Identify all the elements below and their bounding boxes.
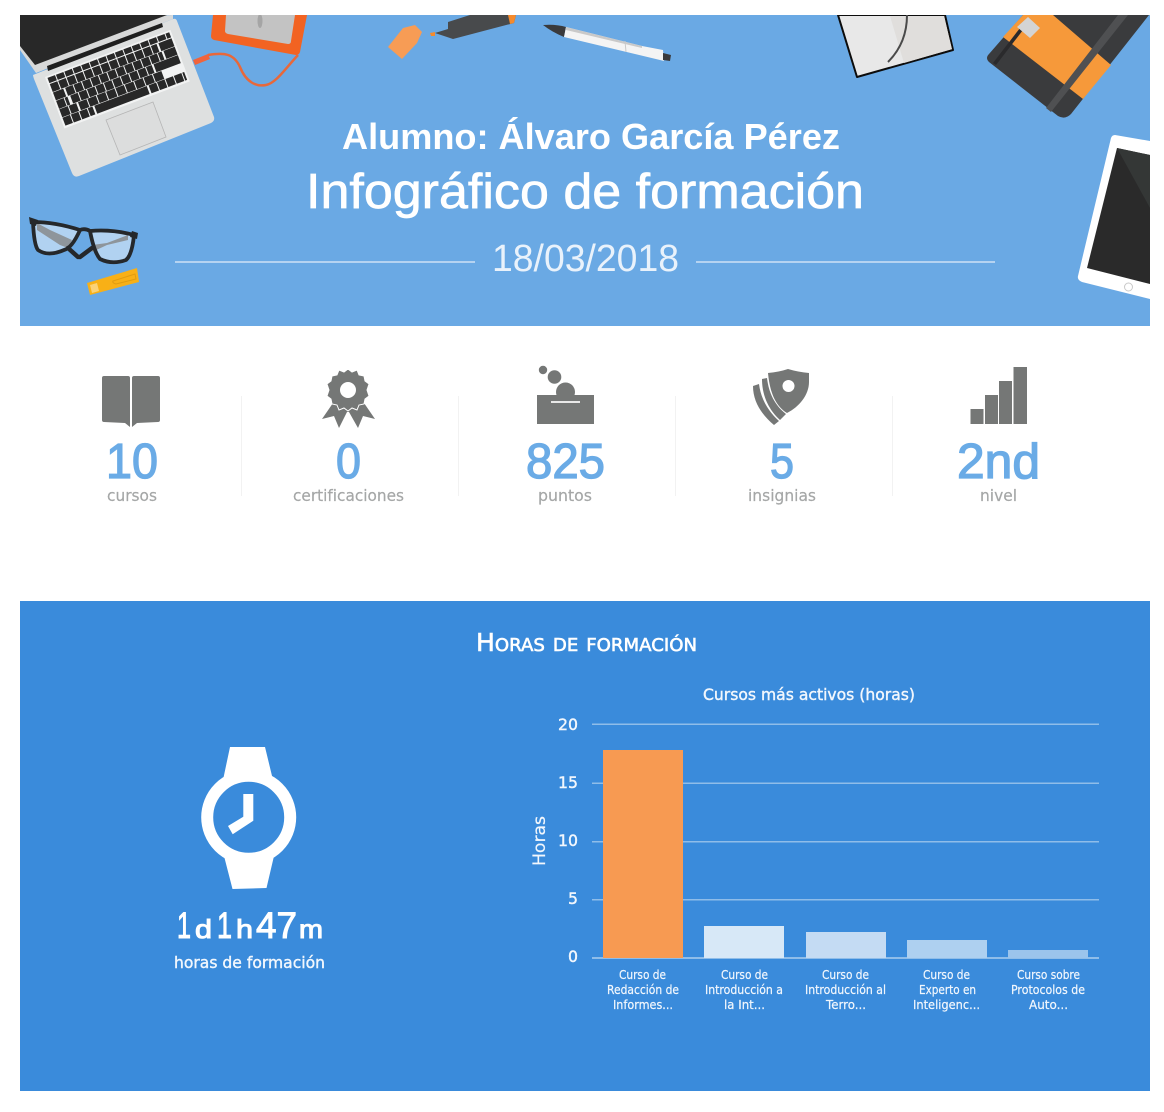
x axis labels: Introducción a (705, 983, 783, 997)
panel: statistics row (102, 366, 1040, 505)
x axis labels: Redacción de (607, 983, 679, 997)
y axis title: Horas (530, 816, 550, 866)
label: puntos (538, 486, 592, 505)
icon: ascending bars (970, 367, 1027, 424)
stat: total training time: d (195, 914, 212, 944)
y axis labels: 0 (568, 947, 578, 966)
icon: layered shield (753, 369, 809, 425)
label: insignias (748, 486, 816, 505)
value: 5 (770, 435, 794, 489)
stat: badges (748, 369, 816, 505)
value: 0 (336, 435, 361, 489)
icon: marker (430, 15, 516, 39)
bars (603, 750, 1088, 958)
icon: dark notebook (987, 15, 1149, 118)
heading: student name: Alumno: Álvaro García Pérez (342, 116, 840, 157)
stat: total training time: 1 (177, 905, 191, 946)
label: certificaciones (293, 486, 404, 505)
x axis labels: Curso de (721, 968, 768, 982)
icon: coins and box (537, 366, 594, 424)
x axis labels: Introducción al (805, 983, 886, 997)
icon: tablet (1078, 135, 1150, 299)
x axis labels: Curso sobre (1017, 968, 1080, 982)
y axis labels: 5 (568, 889, 578, 908)
y axis labels: 15 (558, 773, 578, 792)
bar chart: most active courses (530, 685, 1099, 1012)
x axis labels: Experto en (919, 983, 976, 997)
icon: white notebook (838, 15, 953, 77)
x axis labels: Curso de (923, 968, 970, 982)
icon: pen (543, 25, 671, 61)
x axis labels (607, 968, 1085, 1012)
x axis labels: Protocolos de (1011, 983, 1085, 997)
stat: total training time: h (236, 914, 253, 944)
x axis labels: Inteligenc... (913, 998, 980, 1012)
panel: header banner (20, 14, 1150, 326)
label: cursos (107, 486, 157, 505)
label: nivel (980, 486, 1017, 505)
icon: open book (102, 376, 160, 427)
heading: training hours: Horas de formación (476, 628, 697, 657)
y axis labels (558, 715, 578, 966)
icon: wristwatch (207, 747, 290, 889)
value: 2nd (957, 435, 1040, 489)
x axis labels: Terro... (825, 998, 866, 1012)
stat: courses (102, 376, 160, 505)
stat: level (957, 367, 1040, 505)
icon: glasses (29, 217, 138, 262)
stat: points (526, 366, 605, 505)
stat: total training time: 1 (217, 905, 232, 946)
value: 825 (526, 435, 605, 489)
chart title: Cursos más activos (horas) (703, 685, 915, 704)
x axis labels: Curso de (619, 968, 666, 982)
stat: total training time: 47 (256, 905, 297, 946)
y axis labels: 10 (558, 831, 578, 850)
stat: certifications (293, 369, 404, 505)
icon: marker cap (388, 25, 422, 59)
x axis labels: Auto... (1029, 998, 1068, 1012)
panel: training hours (20, 601, 1150, 1091)
x axis labels: Curso de (822, 968, 869, 982)
stat: total training time: m (299, 914, 323, 944)
icon: award rosette (322, 369, 375, 428)
value: 10 (106, 435, 158, 489)
icon: USB stick (87, 268, 139, 295)
x axis labels: la Int... (724, 998, 765, 1012)
x axis labels: Informes... (613, 998, 673, 1012)
stat: total training time (177, 905, 323, 946)
text: date: 18/03/2018 (492, 238, 679, 280)
label: total training time: horas de formación (174, 953, 325, 972)
heading: main title: Infográfico de formación (306, 165, 864, 219)
icon: orange hard drive and cable (193, 14, 307, 85)
y axis labels: 20 (558, 715, 578, 734)
icon: laptop (20, 15, 214, 177)
icon: desk items (20, 14, 1150, 299)
